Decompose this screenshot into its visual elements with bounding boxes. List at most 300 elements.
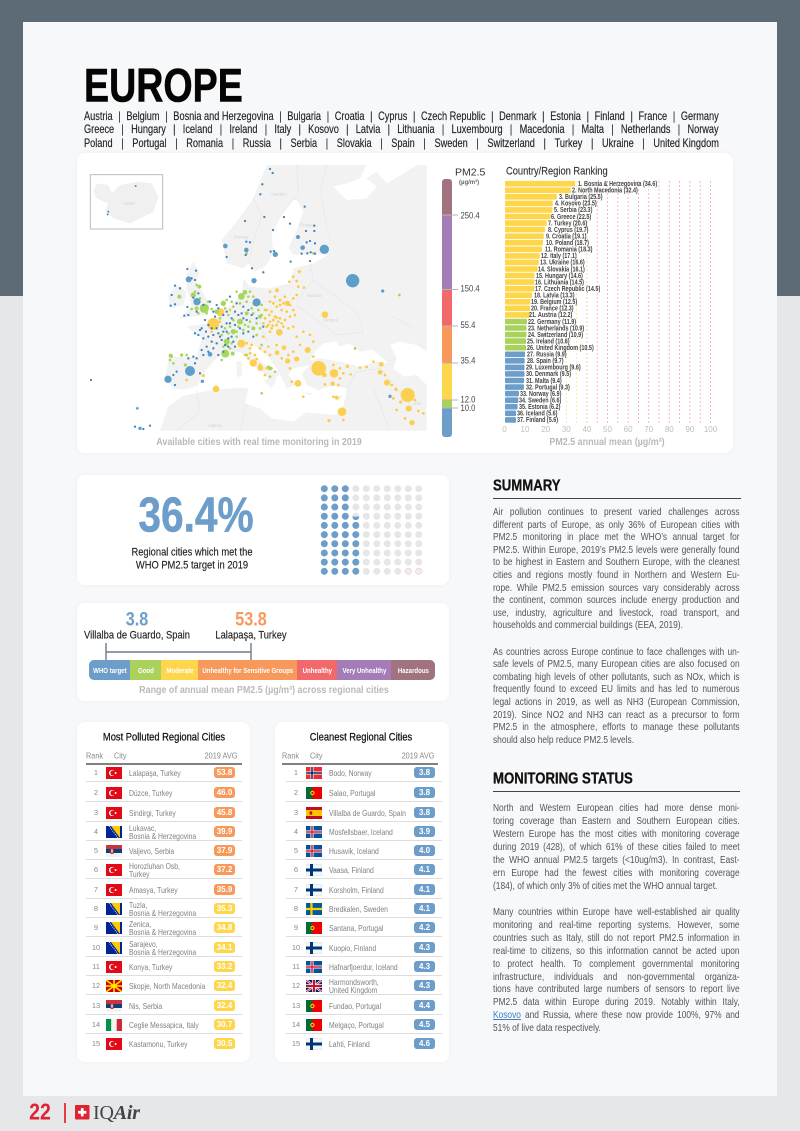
- row 14: 14: [92, 1020, 100, 1029]
- PM2.5 colour legend: 250.4: [460, 210, 480, 221]
- summary text: cities and regions mostly found in Northern and Western Eu-: [493, 570, 740, 581]
- row 4: Bosnia & Herzegovina: [129, 831, 196, 841]
- row 12: Skopje, North Macedonia: [129, 981, 205, 991]
- row 3: 45.8: [217, 808, 232, 817]
- row 15: Lahti, Finland: [329, 1039, 370, 1049]
- row 14: [86, 1016, 242, 1034]
- country ranking bar chart: 6. Greece (22.5): [551, 213, 591, 221]
- country list: Ukraine: [602, 136, 634, 150]
- row 4: Mosfellsbaer, Iceland: [329, 827, 393, 837]
- country list: |: [510, 122, 512, 136]
- row 11: 11: [292, 962, 300, 971]
- panel: cleanest cities: [275, 722, 449, 1062]
- city dots: green: [169, 285, 272, 370]
- row 15: 15: [292, 1039, 300, 1048]
- country list: |: [673, 109, 675, 123]
- country ranking bar chart: 22. Germany (11.9): [528, 318, 576, 326]
- AQI scale bar: Moderate: [166, 666, 193, 674]
- country ranking bar chart: 35. Estonia (6.2): [519, 403, 560, 411]
- country ranking bar chart: 31. Malta (9.4): [526, 377, 562, 385]
- monitoring text: tions have contributed large numbers of sensors to report live: [493, 984, 740, 995]
- row 9: 9: [94, 923, 98, 932]
- row 12: 4.3: [419, 981, 430, 990]
- summary text: rope. While PM2.5 emission sources vary considerably across: [493, 583, 740, 594]
- summary text: PM2.5. Within Europe, 2019’s PM2.5 levels were generally found: [493, 545, 740, 556]
- country list: |: [388, 122, 390, 136]
- row 12: 12: [92, 981, 100, 990]
- row 5: 37.9: [217, 846, 232, 855]
- summary text: 2019). Since NO2 and NH3 can react as a precursor to form: [493, 710, 740, 721]
- row 8: Bosnia & Herzegovina: [129, 908, 196, 918]
- country list: |: [611, 122, 614, 136]
- monitoring text: during 2019 (428), of which 61% of these cities failed to meet: [493, 842, 740, 853]
- country ranking bar chart: 100: [704, 425, 718, 434]
- logo: IQAir: IQAir: [93, 1102, 140, 1124]
- row 13: Fundao, Portugal: [329, 1001, 381, 1011]
- row 12: [286, 977, 442, 995]
- country ranking bar chart: 37. Finland (5.6): [517, 417, 558, 424]
- row 14: Ceglie Messapica, Italy: [129, 1020, 199, 1030]
- row 6: Turkey: [129, 869, 150, 879]
- range caption: Range of annual mean PM2.5 (µg/m³) across regional cities: [139, 683, 389, 695]
- country ranking bar chart: 10. Poland (18.7): [546, 239, 589, 247]
- min value: 3.8: [126, 610, 148, 630]
- row 10: Sarajevo,: [129, 939, 158, 949]
- monitoring text: countries such as Italy, still do not report PM2.5 information in: [493, 933, 740, 944]
- monitoring text: real-time to citizens, so this information cannot be acted upon: [493, 946, 740, 957]
- country ranking bar chart: [502, 166, 718, 434]
- country list: Luxembourg: [452, 122, 503, 136]
- row 14: Melgaço, Portugal: [329, 1020, 384, 1030]
- country list: [84, 109, 719, 150]
- row 1: 1: [294, 768, 298, 777]
- monitoring text: ern Europe had the fewest cities with monitoring coverage: [493, 868, 740, 879]
- country ranking bar chart: 26. United Kingdom (10.5): [527, 344, 594, 352]
- country list: |: [173, 122, 176, 136]
- country list: |: [279, 136, 282, 150]
- row 3: 3.8: [419, 808, 430, 817]
- country list: Bosnia and Herzegovina: [173, 109, 274, 123]
- monitoring text: the WHO annual PM2.5 targets (<10ug/m3). In contrast, East-: [493, 855, 740, 866]
- country list: Germany: [681, 109, 719, 123]
- country ranking bar chart: 12. Italy (17.1): [541, 253, 577, 260]
- row 5: Valjevo, Serbia: [129, 846, 174, 856]
- row 9: 4.2: [419, 923, 430, 932]
- country list: Kosovo: [308, 122, 339, 136]
- country ranking bar chart: 36. Iceland (5.6): [517, 410, 558, 418]
- range bracket: [105, 643, 252, 660]
- row 14: 4.5: [419, 1020, 430, 1029]
- monitoring text: Many countries within Europe have well-established air quality: [493, 907, 740, 918]
- AQI scale bar: [89, 660, 435, 680]
- panel: cities meeting target: [77, 475, 449, 585]
- summary text: households and commercial buildings (EEA, 2019).: [493, 620, 683, 631]
- inset: Iceland: [90, 175, 163, 229]
- row 8: 35.3: [217, 904, 232, 913]
- country list: Estonia: [550, 109, 581, 123]
- table header: Rank: [86, 751, 103, 761]
- country ranking bar chart: 21. Austria (12.2): [529, 312, 572, 319]
- country ranking bar chart: 14. Slovakia (16.1): [538, 266, 585, 274]
- inset: Iceland: Iceland: [123, 201, 135, 205]
- country list: |: [491, 109, 494, 123]
- PM2.5 colour legend: 35.4: [460, 355, 476, 366]
- monitoring text: Kosovo and Russia, where these now provide 100%, 97% and: [493, 1010, 740, 1021]
- table rows: cleanest: [286, 767, 442, 1050]
- country ranking bar chart: 33. Norway (6.9): [520, 390, 561, 398]
- row 13: 32.4: [217, 1001, 232, 1010]
- row 12: United Kingdom: [329, 985, 377, 995]
- row 11: Konya, Turkey: [129, 962, 172, 972]
- country list: |: [630, 109, 633, 123]
- summary text: to be highest in Eastern and Southern Europe, with the cleanest: [493, 557, 740, 568]
- table header: [86, 750, 242, 765]
- row 1: 3.8: [419, 768, 430, 777]
- row 13: 4.4: [419, 1001, 430, 1010]
- row 6: 6: [94, 865, 98, 874]
- footer divider: [64, 1103, 66, 1123]
- country ranking bar chart: 19. Belgium (12.5): [531, 299, 577, 306]
- row 2: [286, 784, 442, 802]
- small yellow dots: [187, 277, 423, 420]
- map of monitored cities: Finland: [300, 223, 314, 228]
- row 11: [86, 958, 242, 976]
- row 4: 39.9: [217, 827, 232, 836]
- monitoring text: (184), of which only 3% of cities met the WHO annual target.: [493, 881, 717, 892]
- cleanest heading: Cleanest Regional Cities: [310, 731, 412, 743]
- row 2: 2: [94, 788, 98, 797]
- row 11: [286, 958, 442, 976]
- country list: |: [544, 136, 546, 150]
- PM2.5 colour legend: 55.4: [460, 319, 476, 330]
- summary text: [493, 507, 740, 746]
- row 9: 9: [294, 923, 298, 932]
- country list: |: [118, 109, 121, 123]
- heading: monitoring status: MONITORING STATUS: [493, 770, 633, 787]
- table header: 2019 AVG: [401, 751, 434, 761]
- row 5: [286, 842, 442, 860]
- country ranking bar chart: 28. Spain (9.7): [527, 358, 564, 365]
- big percentage: 36.4%: [138, 488, 253, 542]
- row 9: [286, 919, 442, 937]
- country ranking bar chart: 40: [582, 425, 592, 434]
- summary text: the continent, common sources include energy production and: [493, 595, 740, 606]
- map of monitored cities: Algeria: [208, 423, 222, 428]
- country list: |: [346, 122, 349, 136]
- row 10: Bosnia & Herzegovina: [129, 947, 196, 957]
- country list: |: [370, 109, 372, 123]
- summary text: As countries across Europe continue to face challenges with un-: [493, 647, 740, 658]
- country list: Ireland: [229, 122, 257, 136]
- country list: Sweden: [434, 136, 468, 150]
- row 15: [292, 1038, 435, 1050]
- row 11: 33.2: [217, 962, 232, 971]
- row 5: [86, 842, 242, 860]
- row 3: 3: [94, 808, 98, 817]
- country list: |: [220, 122, 222, 136]
- row 10: 10: [292, 943, 300, 952]
- country list: Portugal: [132, 136, 167, 150]
- row 7: [86, 881, 242, 899]
- country ranking bar chart: 50: [603, 425, 612, 434]
- row 6: Horozluhan Osb,: [129, 861, 180, 871]
- map caption: Available cities with real time monitoring in 2019: [156, 436, 362, 448]
- country ranking bar chart: 5. Serbia (23.3): [554, 207, 592, 214]
- country ranking bar chart: 9. Croatia (19.1): [546, 233, 587, 241]
- AQI scale bar: Unhealthy for Sensitive Groups: [202, 666, 293, 674]
- country ranking bar chart: 80: [665, 425, 674, 434]
- row 6: [286, 861, 442, 879]
- country list: Italy: [274, 122, 291, 136]
- table header: Rank: [282, 751, 299, 761]
- country list: Serbia: [291, 136, 317, 150]
- monitoring text: monitoring and real-time reporting systems. However, some: [493, 920, 740, 931]
- country list: Cyprus: [378, 109, 407, 123]
- panel: map and ranking: [77, 153, 733, 453]
- map of monitored cities: Sweden: [271, 191, 287, 196]
- monitoring text: toring coverage than Eastern and Southern European cities.: [493, 816, 740, 827]
- row 14: 14: [292, 1020, 300, 1029]
- country ranking bar chart: 20. France (12.3): [531, 305, 574, 313]
- row 13: [286, 997, 442, 1015]
- monitoring text: Western Europe has the most cities with monitoring coverage: [493, 829, 740, 840]
- row 7: 7: [94, 885, 98, 894]
- country list: Russia: [243, 136, 271, 150]
- country list: Greece: [84, 122, 114, 136]
- country ranking bar chart: 0: [502, 425, 507, 434]
- row 15: 15: [92, 1039, 100, 1048]
- row 1: 1: [94, 768, 98, 777]
- small blue dots: [91, 169, 315, 429]
- country list: Netherlands: [621, 122, 671, 136]
- country ranking bar chart: 15. Hungary (14.6): [536, 272, 583, 280]
- country ranking bar chart: 16. Lithuania (14.5): [535, 279, 584, 287]
- row 3: Villalba de Guardo, Spain: [329, 808, 406, 818]
- row 10: 10: [92, 943, 100, 952]
- country ranking bar chart: 8. Cyprus (19.7): [548, 226, 589, 234]
- country ranking bar chart: 32. Portugal (9.3): [526, 384, 570, 392]
- country ranking bar chart: 7. Turkey (20.6): [548, 220, 587, 228]
- country ranking bar chart: 70: [644, 425, 654, 434]
- row 15: [92, 1038, 235, 1050]
- country list: Finland: [595, 109, 625, 123]
- row 11: 4.3: [419, 962, 430, 971]
- panel: most polluted cities: [77, 722, 250, 1062]
- country ranking bar chart: 34. Sweden (6.6): [519, 397, 561, 405]
- country list: |: [327, 109, 329, 123]
- summary text: Air pollution continues to present varied challenges across: [493, 507, 740, 518]
- row 8: 8: [294, 904, 298, 913]
- max value: 53.8: [235, 610, 267, 630]
- page number: 22: [29, 1098, 51, 1124]
- country ranking bar chart: 25. Ireland (10.6): [527, 338, 570, 346]
- row 2: Salao, Portugal: [329, 788, 375, 798]
- row 14: [286, 1016, 442, 1034]
- country list: |: [591, 136, 593, 150]
- summary text: frequently found to exceed EU limits and has led to numerous: [493, 684, 740, 695]
- monitoring text: PM2.5 data within Europe during 2019. Notably within Italy,: [493, 997, 740, 1008]
- row 6: Vaasa, Finland: [329, 865, 374, 875]
- row 6: 4.1: [419, 865, 430, 874]
- row 10: Kuopio, Finland: [329, 943, 376, 953]
- country list: Iceland: [183, 122, 212, 136]
- row 3: [286, 804, 442, 822]
- row 2: 46.0: [217, 788, 232, 797]
- row 4: 4: [294, 827, 298, 836]
- country list: |: [587, 109, 589, 123]
- row 9: Bosnia & Herzegovina: [129, 927, 196, 937]
- row 9: Zenica,: [129, 919, 151, 929]
- country list: Austria: [84, 109, 113, 123]
- row 13: Nis, Serbia: [129, 1001, 162, 1011]
- row 3: 3: [294, 808, 298, 817]
- summary text: should also help reduce PM2.5 levels.: [493, 735, 634, 746]
- row 1: Lalapaşa, Turkey: [129, 768, 181, 778]
- table header: City: [310, 751, 323, 761]
- country ranking bar chart: 1. Bosnia & Herzegovina (34.6): [578, 180, 657, 188]
- country list: |: [476, 136, 479, 150]
- row 9: 34.8: [217, 923, 232, 932]
- AQI scale bar: Hazardous: [397, 666, 429, 674]
- country ranking bar chart: 3. Bulgaria (25.5): [559, 194, 603, 201]
- country ranking bar chart: Country/Region Ranking: [506, 166, 608, 178]
- percentage caption: [131, 546, 253, 572]
- country list: |: [299, 122, 301, 136]
- country list: Belgium: [126, 109, 160, 123]
- monitoring text: infrastructure, individuals and non-governmental organiza-: [493, 972, 740, 982]
- row 8: 4.1: [419, 904, 430, 913]
- country list: |: [232, 136, 234, 150]
- country list: Latvia: [356, 122, 380, 136]
- row 10: 34.1: [217, 943, 232, 952]
- table rows: most polluted: [86, 767, 242, 1050]
- row 3: [86, 804, 242, 822]
- AQI scale bar: WHO target: [93, 666, 126, 674]
- country list: France: [639, 109, 667, 123]
- country ranking bar chart: 24. Switzerland (10.9): [528, 331, 583, 339]
- country list: Romania: [186, 136, 223, 150]
- country list: Malta: [581, 122, 604, 136]
- AQI scale bar: Unhealthy: [302, 666, 332, 674]
- row 7: 35.9: [217, 885, 232, 894]
- row 5: 5: [94, 846, 98, 855]
- monitoring text: [493, 803, 740, 1034]
- row 14: 30.7: [217, 1020, 232, 1029]
- row 2: [86, 784, 242, 802]
- country ranking bar chart: 30. Denmark (9.5): [526, 371, 571, 378]
- row 8: [86, 900, 242, 918]
- country list: Switzerland: [487, 136, 535, 150]
- table header: City: [114, 751, 127, 761]
- city dots: yellow: [202, 270, 415, 425]
- row 15: Kastamonu, Turkey: [129, 1039, 187, 1049]
- country ranking bar chart: 23. Netherlands (10.9): [528, 325, 584, 333]
- country ranking bar chart: 18. Latvia (13.3): [534, 292, 575, 300]
- country list: Norway: [687, 122, 719, 136]
- monitoring text: North and Western European cities had more dense moni-: [493, 803, 740, 814]
- country ranking bar chart: 90: [685, 425, 695, 434]
- summary text: safe levels of PM2.5, many European cities are also focused on: [493, 659, 740, 670]
- country list: Croatia: [335, 109, 364, 123]
- summary text: PM2.5 monitoring in place met the WHO’s annual target for: [493, 532, 740, 543]
- row 2: Düzce, Turkey: [129, 788, 172, 798]
- heading: monitoring status: [493, 770, 740, 792]
- monitoring text: 51% of live data respectively.: [493, 1023, 601, 1034]
- monitoring text: to protect health. To complement governmental monitoring: [493, 959, 740, 970]
- PM2.5 colour legend: 10.0: [460, 402, 476, 413]
- row 11: Hafnarfjoerdur, Iceland: [329, 962, 398, 972]
- map of monitored cities: Ukraine: [323, 318, 339, 323]
- table header: [282, 750, 438, 765]
- row 4: 3.9: [419, 827, 430, 836]
- row 8: 8: [94, 904, 98, 913]
- row 7: Amasya, Turkey: [129, 885, 178, 895]
- heading: summary: [493, 478, 741, 499]
- PM2.5 colour legend: [442, 166, 486, 437]
- row 8: [286, 900, 442, 918]
- country list: |: [542, 109, 545, 123]
- map of monitored cities: [90, 165, 426, 431]
- country ranking bar chart: 27. Russia (9.9): [527, 351, 567, 359]
- country list: |: [423, 136, 426, 150]
- country list: |: [265, 122, 267, 136]
- title: EUROPE: [84, 58, 243, 112]
- country ranking bar chart: 30: [562, 425, 571, 434]
- country list: |: [678, 122, 680, 136]
- summary text: different parts of Europe, as only 36% of European cities with: [493, 520, 740, 531]
- country list: |: [121, 122, 124, 136]
- country list: Bulgaria: [287, 109, 321, 123]
- country list: Slovakia: [337, 136, 372, 150]
- row 12: Harmondsworth,: [329, 977, 379, 987]
- country ranking bar chart: 11. Romania (18.3): [545, 246, 592, 254]
- percentage caption: Regional cities which met the: [131, 546, 253, 558]
- row 12: [86, 977, 242, 995]
- row 8: Bredkalen, Sweden: [329, 904, 388, 914]
- row 3: Sindirgi, Turkey: [129, 808, 176, 818]
- map of monitored cities: Iran: [414, 401, 422, 406]
- row 15: 4.6: [419, 1039, 430, 1048]
- PM2.5 colour legend: 12.0: [460, 394, 476, 405]
- row 1: [86, 764, 242, 782]
- country list: United Kingdom: [653, 136, 719, 150]
- row 10: 4.3: [419, 943, 430, 952]
- country ranking bar chart: 2. North Macedonia (32.4): [572, 187, 638, 195]
- dot matrix: [320, 485, 422, 575]
- row 6: 6: [294, 865, 298, 874]
- row 6: 37.2: [217, 865, 232, 874]
- country list: Hungary: [131, 122, 166, 136]
- map of monitored cities: Belarus: [307, 293, 322, 298]
- most polluted heading: Most Polluted Regional Cities: [103, 731, 225, 743]
- row 10: [86, 939, 242, 957]
- PM2.5 colour legend: (µg/m³): [459, 179, 479, 186]
- panel: PM2.5 range: [77, 603, 449, 701]
- row 4: 4: [94, 827, 98, 836]
- country ranking bar chart: 4. Kosovo (23.5): [555, 200, 597, 208]
- country ranking bar chart: 20: [541, 425, 551, 434]
- country list: |: [175, 136, 178, 150]
- row 8: Tuzla,: [129, 900, 147, 910]
- PM2.5 colour legend: 150.4: [460, 283, 480, 294]
- small green dots: [170, 253, 399, 393]
- country list: Czech Republic: [421, 109, 485, 123]
- country list: |: [442, 122, 444, 136]
- country list: |: [326, 136, 328, 150]
- summary text: use, industry, agriculture and livestock, road transport, and: [493, 608, 740, 619]
- country list: Lithuania: [397, 122, 435, 136]
- row 1: [286, 764, 442, 782]
